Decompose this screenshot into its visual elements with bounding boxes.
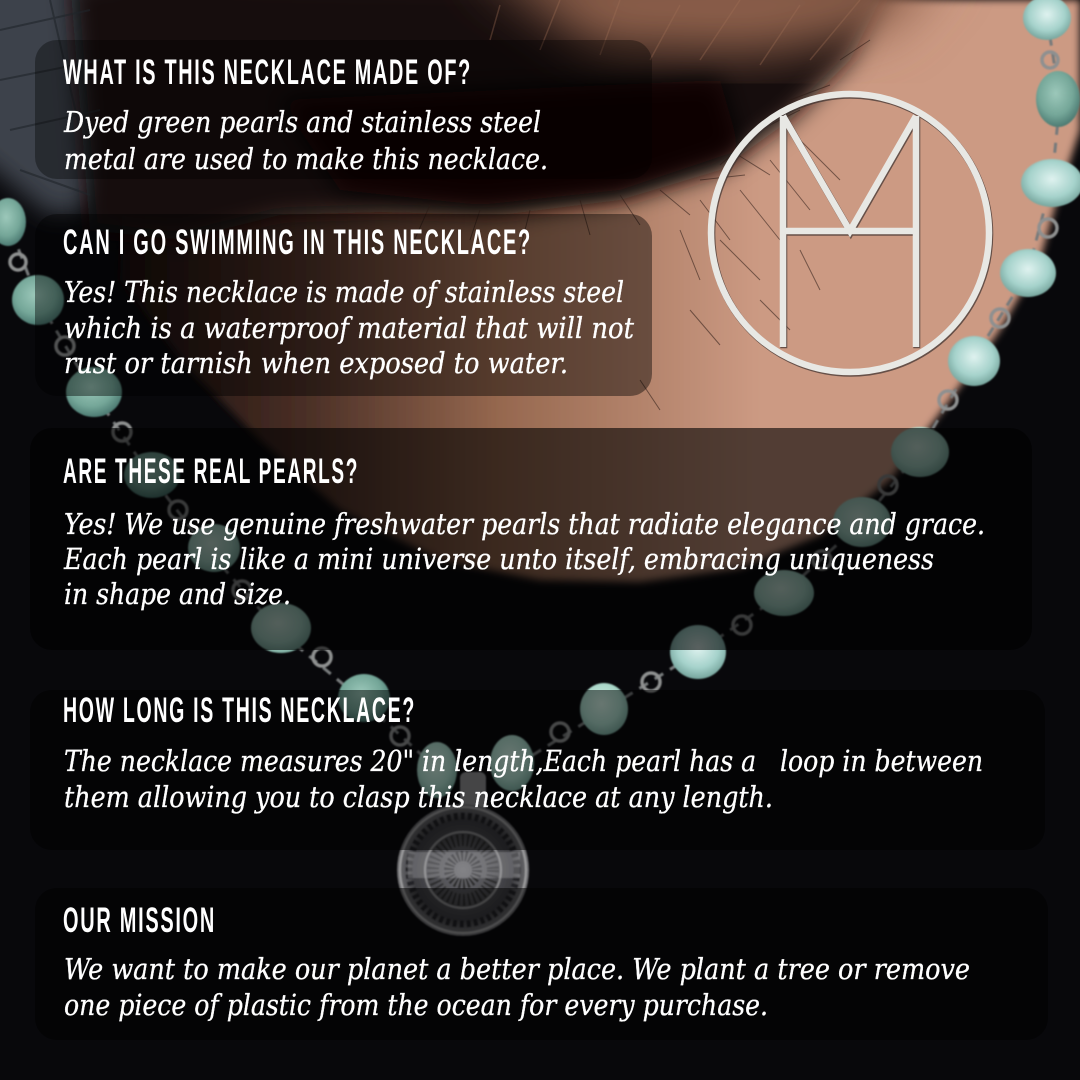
body text: [64, 276, 634, 380]
body text: which is a waterproof material that will not: [64, 312, 634, 345]
heading: HOW LONG IS THIS NECKLACE?: [63, 691, 416, 730]
tattooed shoulder at left: [0, 0, 120, 215]
body text: them allowing you to clasp this necklace at any length.: [64, 781, 773, 814]
beard: [70, 0, 890, 240]
body text: [63, 106, 548, 176]
body text: Dyed green pearls and stainless steel: [63, 106, 541, 139]
heading: ARE THESE REAL PEARLS?: [63, 452, 359, 491]
body text: [64, 953, 970, 1022]
pendant bail: [460, 772, 486, 812]
body text: Each pearl is like a mini universe unto itself, embracing uniqueness: [63, 543, 934, 576]
logo mark: [711, 94, 989, 372]
heading: OUR MISSION: [63, 901, 216, 940]
body text: [64, 745, 983, 814]
panel: how long is this necklace: [30, 690, 1045, 850]
chain links: [8, 18, 1060, 770]
beard hair strokes: [410, 40, 870, 410]
panel: what is this necklace made of: [35, 40, 652, 179]
panel: are these real pearls: [30, 428, 1032, 650]
coin pendant: [397, 804, 529, 936]
panel: our mission: [35, 888, 1048, 1040]
body text: [63, 508, 985, 611]
logo shadow: [712, 95, 990, 373]
logo: monogram in circle: [711, 94, 990, 373]
body text: The necklace measures 20" in length,Each pearl has a loop in between: [64, 745, 983, 778]
chain rings: [10, 52, 1058, 745]
heading: WHAT IS THIS NECKLACE MADE OF?: [63, 53, 472, 92]
body text: Yes! We use genuine freshwater pearls that radiate elegance and grace.: [64, 508, 985, 541]
pearls: [0, 0, 1080, 798]
body text: one piece of plastic from the ocean for every purchase.: [64, 989, 768, 1022]
skin of the neck: [120, 0, 1080, 582]
heading: CAN I GO SWIMMING IN THIS NECKLACE?: [63, 223, 532, 262]
panel: can I go swimming: [35, 214, 652, 396]
tattoo hatching: [0, 0, 100, 195]
body text: metal are used to make this necklace.: [64, 143, 548, 176]
body text: in shape and size.: [64, 578, 291, 611]
body text: rust or tarnish when exposed to water.: [64, 347, 568, 380]
body text: Yes! This necklace is made of stainless steel: [64, 276, 624, 309]
body text: We want to make our planet a better place. We plant a tree or remove: [64, 953, 970, 986]
brown hair highlights: [490, 0, 860, 65]
